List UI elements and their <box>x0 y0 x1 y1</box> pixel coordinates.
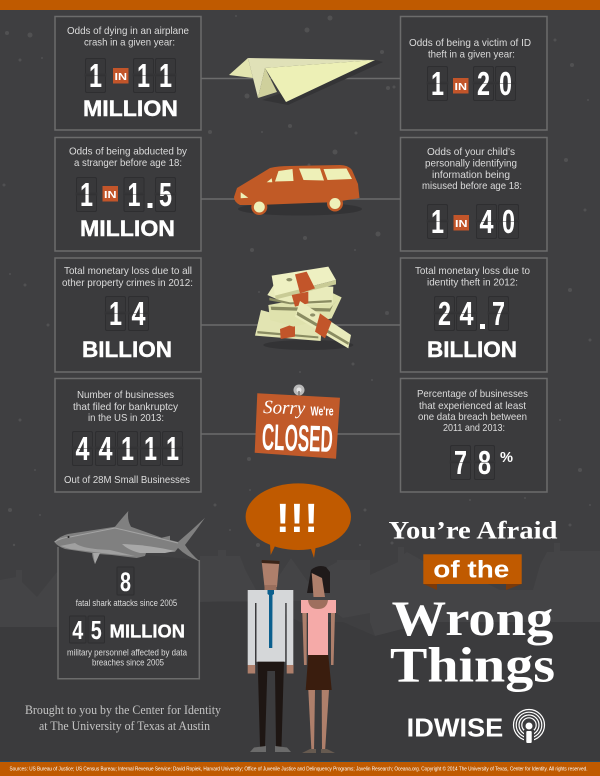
flip counter: 14: 1 <box>109 295 122 332</box>
panel: data breaches <box>400 378 547 492</box>
text: identity theft loss description: Total monetary loss due to <box>415 266 530 277</box>
ground <box>0 602 600 762</box>
flip counter: 24.7: 7 <box>492 295 505 332</box>
logo: IDWISE <box>407 710 544 745</box>
text: credits: at The University of Texas at Austin <box>39 719 211 733</box>
flip counter: 45 million: 4 <box>72 615 84 645</box>
flip counter: 44111: 1 <box>144 430 157 467</box>
banner: of the <box>423 554 522 590</box>
flip counter: 1 in 40: 4 <box>480 203 494 240</box>
speech bubble <box>246 483 351 558</box>
stars <box>2 15 592 547</box>
text: property crime description: other property crimes in 2012: <box>62 278 193 289</box>
panel: property crime loss <box>55 258 201 372</box>
text: credits: Brought to you by the Center for Identity <box>25 703 222 717</box>
text: property crime description: Total monetary loss due to all <box>64 266 192 277</box>
flip counter: 78 percent: 7 <box>454 444 467 481</box>
panel: stranger abduction odds <box>55 138 201 251</box>
icon: sorry we're closed sign: Sorry <box>263 397 306 419</box>
flip counter: 1 in 40: 1 <box>431 203 444 240</box>
panel: identity theft loss <box>400 258 547 372</box>
text: abduction description: Odds of being abducted by <box>69 146 188 158</box>
logo: IDWISE: IDWISE <box>407 713 503 743</box>
text: child identity description: misused before age 18: <box>422 181 522 192</box>
text: child identity description: information being <box>432 170 510 181</box>
flip counter: 45 million: 5 <box>91 615 102 645</box>
flip counter: 8: 8 <box>120 567 131 597</box>
unit: billion: BILLION <box>427 337 517 362</box>
flip counter: 1 in 1.5 <box>76 176 176 213</box>
text: child identity description: personally identifying <box>425 158 517 170</box>
text: small business note: Out of 28M Small Businesses <box>64 475 190 486</box>
flip counter: 1 in 11: 1 <box>89 57 102 94</box>
flip counter: 1 in 20: IN <box>454 81 467 93</box>
title line: things: Things <box>390 636 555 692</box>
flip counter: 1 in 40: 0 <box>502 203 515 240</box>
icon: van <box>234 165 362 216</box>
flip counter: 14 <box>104 295 150 332</box>
icon: sorry we're closed sign <box>255 384 340 460</box>
flip counter: 78 percent: % <box>500 449 513 466</box>
flip counter: 45 million <box>70 615 185 645</box>
title line: you're afraid: You’re Afraid <box>388 518 558 544</box>
flip counter: 14: 4 <box>132 295 146 332</box>
text: military personnel caption: breaches since 2005 <box>92 658 164 668</box>
flip counter: 1 in 40 <box>426 203 520 240</box>
panel: bankruptcies <box>55 378 201 492</box>
flip counter: 1 in 1.5: 5 <box>159 176 172 213</box>
unit: million: MILLION <box>83 96 178 121</box>
panel: ID theft odds <box>400 16 547 130</box>
text: shark attacks caption: fatal shark attacks since 2005 <box>76 598 177 609</box>
flip counter: 1 in 11 <box>84 57 176 94</box>
text: bankruptcy description: Number of businesses <box>77 390 174 401</box>
flip counter: 44111: 4 <box>76 430 90 467</box>
flip counter: 44111: 4 <box>98 430 113 467</box>
text: ID theft description: Odds of being a victim of ID <box>409 38 531 49</box>
icon: sorry we're closed sign: CLOSED <box>261 417 334 460</box>
flip counter: 1 in 40: IN <box>455 218 468 230</box>
icon: sorry we're closed sign: We're <box>310 404 334 418</box>
text: bankruptcy description: in the US in 2013: <box>88 413 164 424</box>
title line: wrong: Wrong <box>392 590 553 646</box>
figure: woman <box>301 566 336 753</box>
title <box>388 518 558 692</box>
panel: airplane crash odds <box>55 16 201 130</box>
flip counter: 1 in 11: 1 <box>137 57 150 94</box>
flip counter: 1 in 11: IN <box>114 71 127 83</box>
flip counter: 1 in 1.5: IN <box>104 189 116 201</box>
flip counter: 78 percent: 8 <box>478 444 491 481</box>
flip counter: 45 million: MILLION <box>110 621 185 641</box>
flip counter: 24.7: 4 <box>460 295 474 332</box>
text: data breach description: Percentage of businesses <box>417 389 528 400</box>
flip counter: 44111: 1 <box>121 430 134 467</box>
flip counter: 1 in 20 <box>426 65 516 102</box>
text: airplane crash description: crash in a given year: <box>84 38 175 48</box>
icon: shark <box>54 511 205 564</box>
text: bankruptcy description: that filed for bankruptcy <box>73 402 179 413</box>
text: airplane crash description: Odds of dying in an airplane <box>67 26 189 37</box>
top bar <box>0 0 600 10</box>
background house silhouettes <box>0 543 600 636</box>
flip counter: 24.7 <box>434 295 510 332</box>
figure: man <box>248 560 294 752</box>
panel: sharks versus military breaches <box>58 547 199 679</box>
text: identity theft loss description: identity theft in 2012: <box>427 278 518 288</box>
text: data breach description: that experienced at least <box>419 401 526 412</box>
text: data breach description: one data breach between <box>418 412 527 423</box>
unit: billion: BILLION <box>82 337 172 362</box>
icon: stacks of money <box>255 267 353 350</box>
flip counter: 1 in 11: 1 <box>159 57 172 94</box>
flip counter: 44111 <box>72 430 184 467</box>
panel: child identity misuse odds <box>400 138 547 251</box>
unit: million: MILLION <box>80 216 175 241</box>
flip counter: 24.7: 2 <box>438 295 451 332</box>
flip counter: 1 in 20: 2 <box>477 65 490 102</box>
flip counter: 1 in 20: 0 <box>499 65 512 102</box>
flip counter: 1 in 20: 1 <box>431 65 444 102</box>
flip counter: 1 in 1.5: 1 <box>80 176 93 213</box>
text: data breach description: 2011 and 2013: <box>443 423 505 434</box>
flip counter: 1 in 1.5: 1 <box>128 176 140 213</box>
connector lines <box>200 78 400 434</box>
text: military personnel caption: military personnel affected by data <box>67 648 188 658</box>
text: ID theft description: theft in a given year: <box>428 50 515 60</box>
banner: of the: of the <box>433 556 509 584</box>
flip counter: 78 percent <box>450 444 513 481</box>
footer bar <box>0 761 600 776</box>
speech bubble: !!! <box>276 495 318 541</box>
icon: paper airplane <box>229 58 383 105</box>
flip counter: 44111: 1 <box>166 430 179 467</box>
text: child identity description: Odds of your child’s <box>427 147 515 158</box>
text: abduction description: a stranger before age 18: <box>74 158 182 169</box>
